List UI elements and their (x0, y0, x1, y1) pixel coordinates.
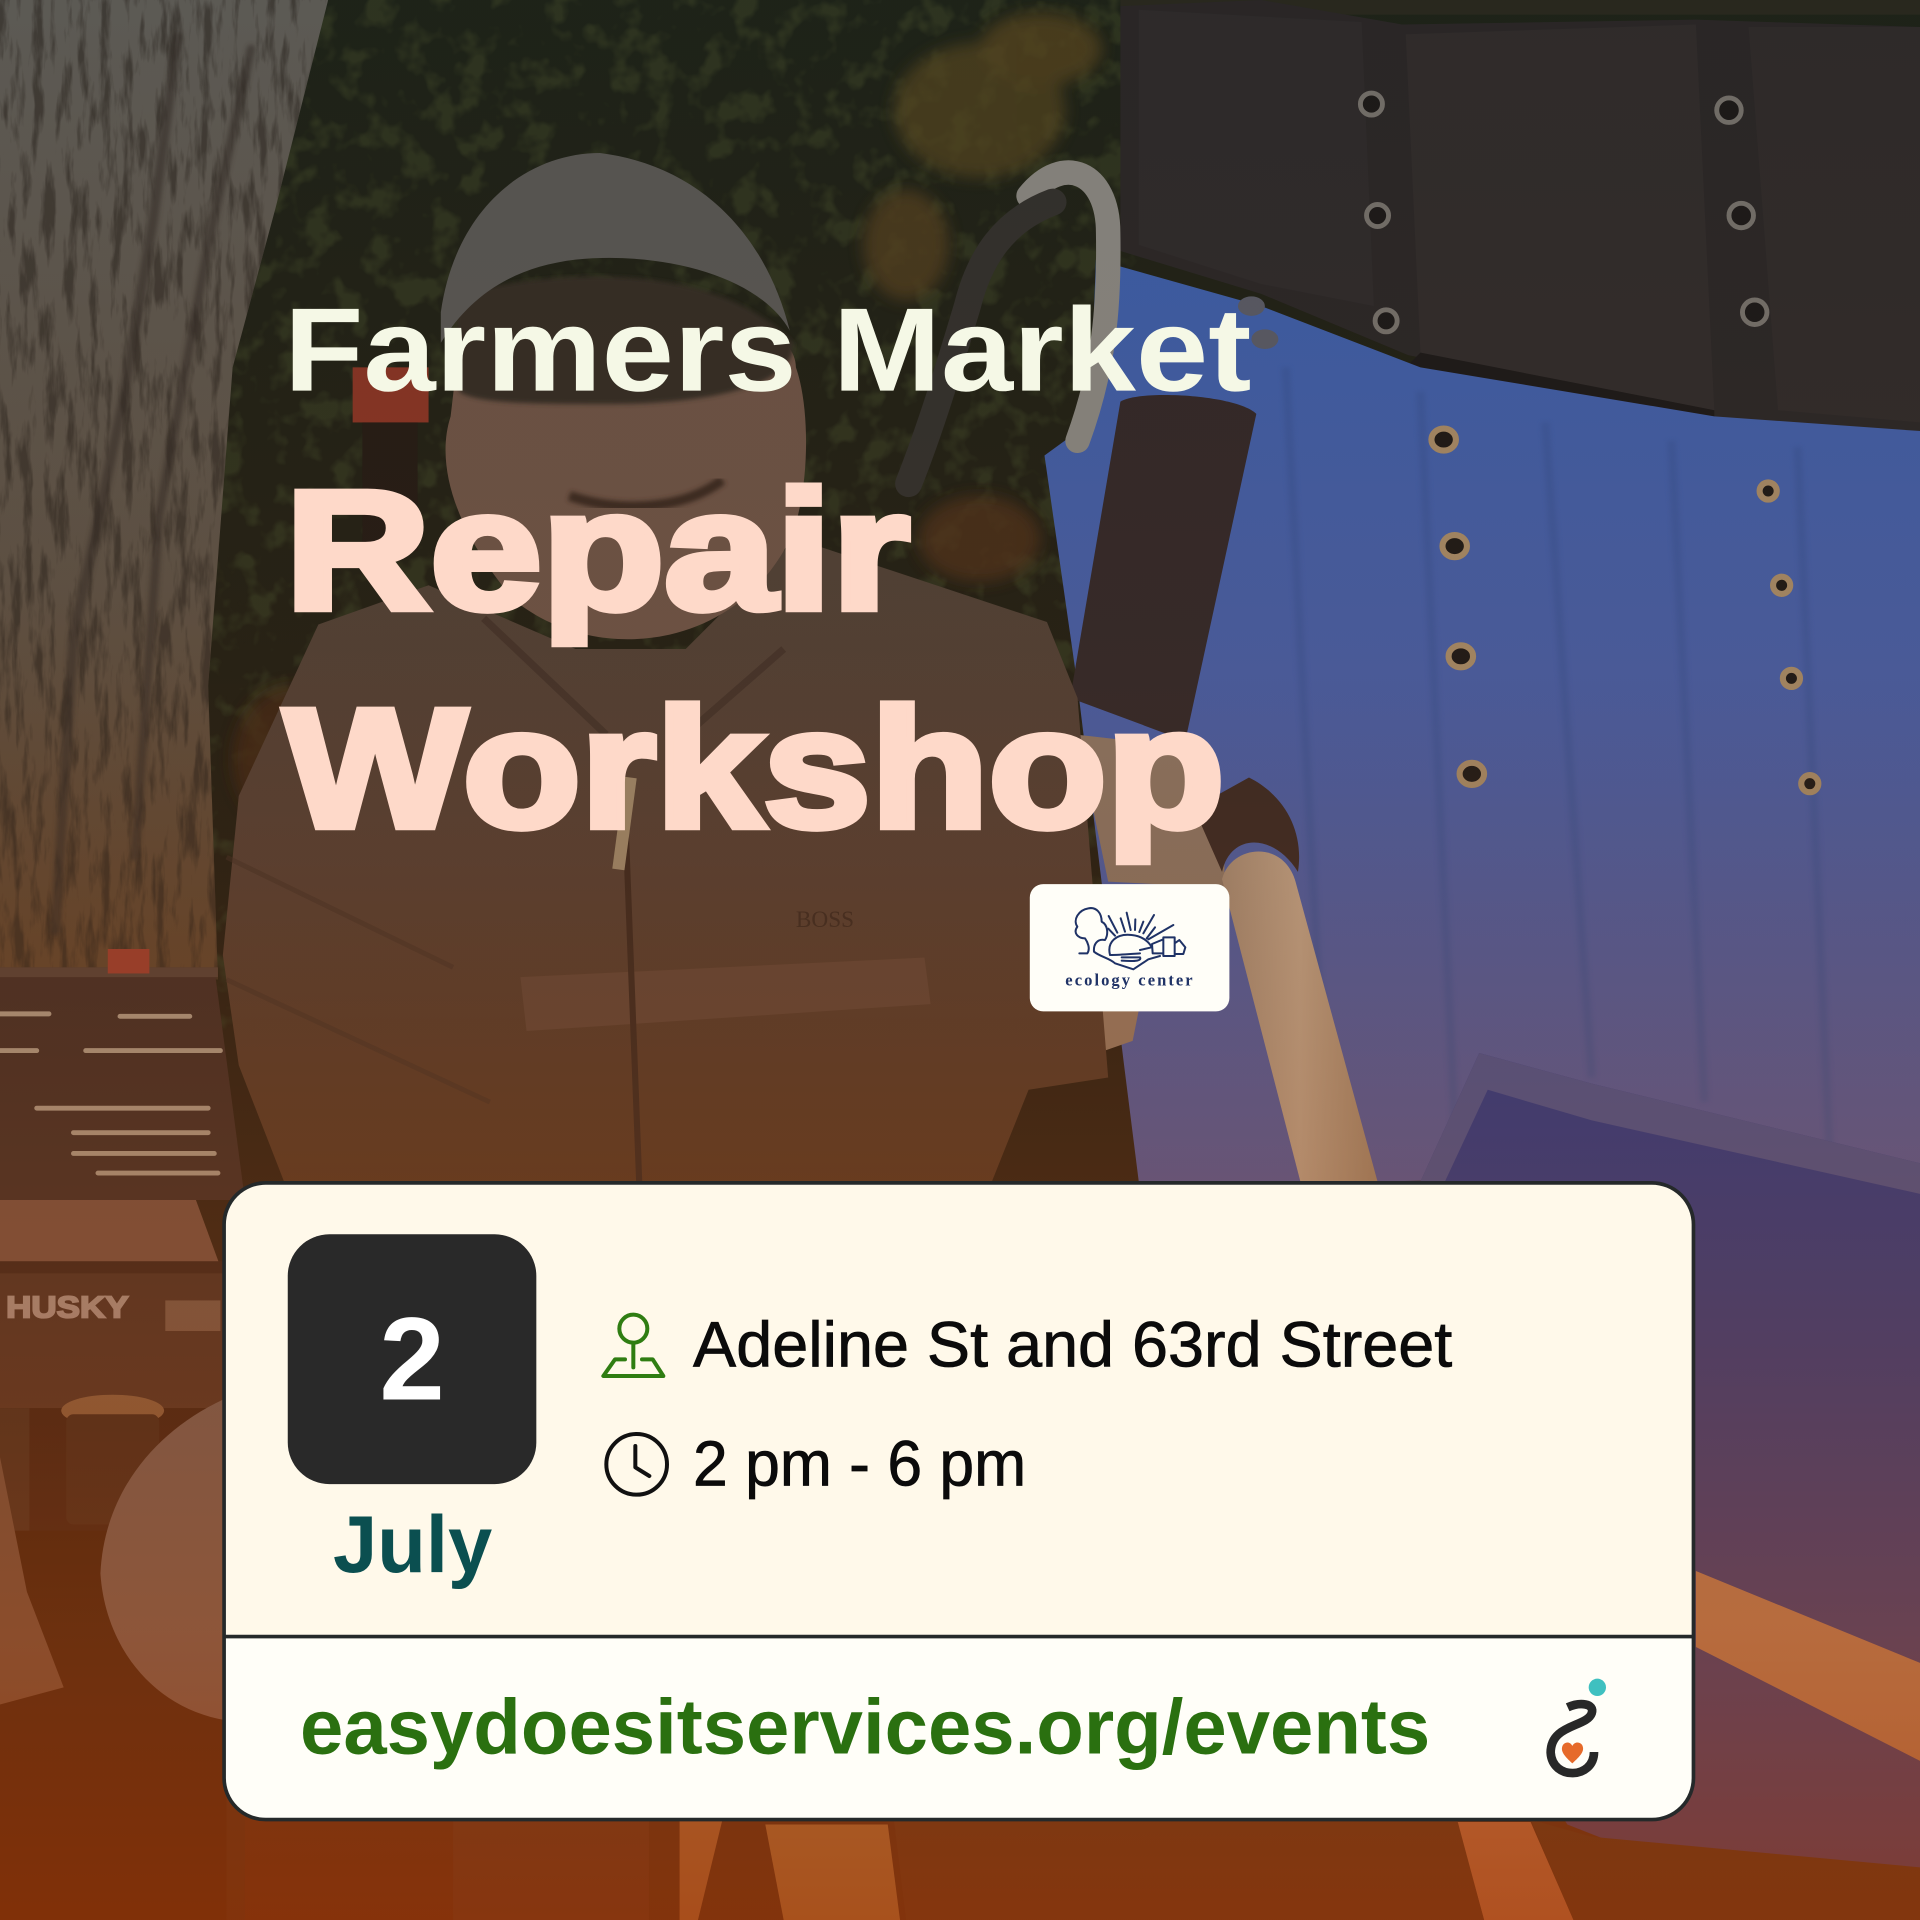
title: Workshop: Workshop (284, 674, 1224, 863)
photo: husky toolbox: HUSKY (6, 1291, 129, 1325)
icon: map pin (603, 1315, 663, 1376)
url strip background (224, 1636, 1693, 1820)
photo: tan chair tube (989, 735, 1920, 1920)
photo: blue chair lower pillow (1420, 1053, 1920, 1892)
logo wordmark: ecology center (1065, 971, 1193, 990)
photo: man (223, 153, 1108, 1182)
month: July (333, 1500, 492, 1590)
icon: clock (606, 1434, 667, 1495)
photo: grey bike handle (909, 173, 1108, 484)
title: Farmers Market: Farmers Market (284, 284, 1251, 417)
photo: red object (353, 367, 429, 551)
title: Repair: Repair (285, 456, 910, 645)
photo: ivy foliage (208, 0, 1139, 1053)
location: Adeline St and 63rd Street (693, 1310, 1453, 1381)
photo: man: BOSS (796, 907, 854, 933)
time: 2 pm - 6 pm (693, 1428, 1026, 1499)
photo: neck and face (446, 300, 806, 639)
logo card: ecology center (1030, 884, 1229, 1011)
info card (224, 1183, 1693, 1820)
photo: husky toolbox (0, 1200, 223, 1543)
photo: black cushion (1120, 0, 1920, 447)
photo: grey cap (441, 153, 790, 343)
photo: jacket (223, 539, 1108, 1182)
icon: ecology center tree and sun (1076, 908, 1185, 969)
photo: blue chair fabric (1044, 260, 1920, 1224)
photo: black foam handle (1070, 395, 1256, 741)
date tile: 2 (379, 1294, 445, 1425)
photo: ground and knee (0, 1400, 1920, 1920)
url: easydoesitservices.org/events (300, 1682, 1430, 1770)
logo: easy does it (1551, 1679, 1606, 1773)
photo: tree trunk (0, 0, 328, 980)
photo: tool tray (0, 949, 245, 1200)
date tile (288, 1234, 536, 1484)
